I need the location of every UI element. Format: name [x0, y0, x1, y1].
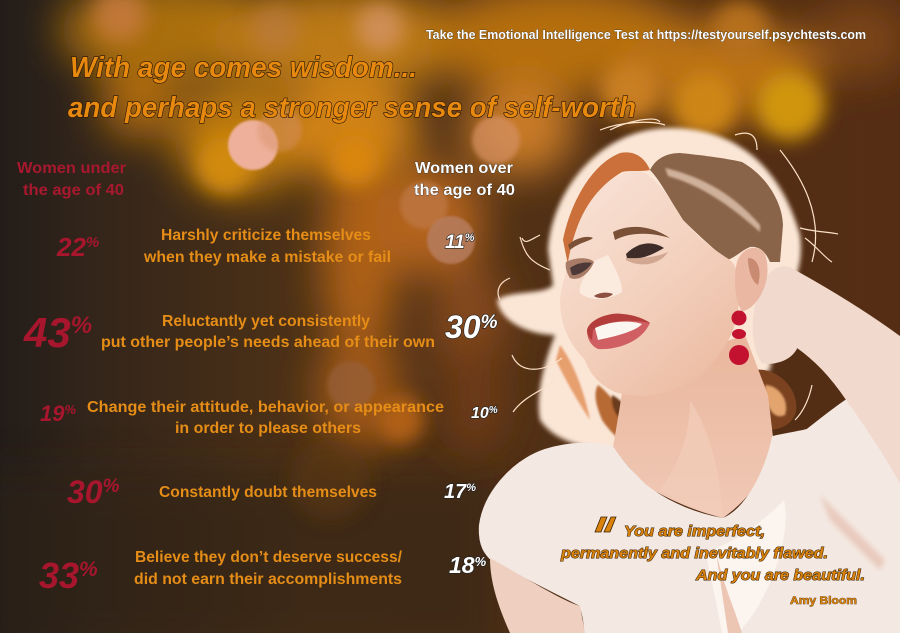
row 5: % [79, 558, 98, 581]
row 1 [56, 227, 475, 266]
flyaway hair strands [498, 119, 838, 420]
orange hairline [563, 152, 650, 265]
earring [729, 310, 749, 365]
hair halo [497, 128, 801, 455]
quote: You are imperfect, [624, 523, 765, 540]
row 2: 30 [445, 309, 481, 345]
row 3: % [64, 402, 76, 417]
row 3: in order to please others [175, 420, 361, 437]
dress [480, 400, 900, 633]
row 2 [23, 309, 498, 356]
row 5: did not earn their accomplishments [134, 571, 402, 588]
row 3 [40, 399, 498, 437]
row 5: % [475, 554, 487, 569]
quote: And you are beautiful. [695, 567, 865, 584]
row 4 [67, 474, 476, 510]
row 1: % [465, 232, 475, 244]
row 4: % [466, 482, 476, 494]
nose [580, 255, 622, 299]
row 1: Harshly criticize themselves [161, 227, 371, 244]
column heading: women under 40 [17, 160, 126, 199]
mouth [587, 314, 650, 349]
row 5: 18 [449, 552, 475, 578]
row 5: 33 [39, 555, 79, 596]
eyebrows and eyes [568, 227, 670, 250]
row 3: 19 [40, 401, 64, 426]
row 2: Reluctantly yet consistently [162, 313, 370, 330]
title: With age comes wisdom... [70, 52, 417, 84]
row 5 [39, 549, 487, 596]
left arm [490, 558, 585, 633]
row 3: 10 [471, 405, 489, 422]
quote: Amy Bloom [790, 595, 857, 607]
column heading: women under 40: Women under [17, 160, 126, 177]
hair curl behind neck [748, 370, 796, 430]
lower hair texture left [556, 345, 638, 452]
row 2: put other people’s needs ahead of their own [101, 334, 435, 351]
title [68, 52, 636, 124]
neck and chest [613, 335, 773, 518]
row 5: Believe they don’t deserve success/ [135, 549, 403, 566]
row 1: when they make a mistake or fail [143, 249, 391, 266]
quote: permanently and inevitably flawed. [560, 545, 828, 562]
column heading: women over 40 [414, 160, 515, 199]
row 1: % [86, 234, 99, 251]
quote [560, 517, 865, 607]
icon: quotation mark [595, 517, 616, 532]
column heading: women under 40: the age of 40 [23, 182, 124, 199]
ear [735, 248, 768, 312]
row 4: 30 [67, 474, 103, 510]
row 3: % [489, 405, 498, 416]
row 4: % [103, 476, 120, 497]
photo: smiling woman [480, 119, 900, 633]
row 3: Change their attitude, behavior, or appearance [87, 399, 444, 416]
row 2: 43 [24, 309, 71, 356]
row 1: 22 [57, 232, 86, 262]
row 2: % [481, 312, 498, 333]
face [560, 171, 740, 396]
row 2: % [71, 312, 92, 339]
row 4: Constantly doubt themselves [159, 484, 377, 501]
column heading: women over 40: Women over [415, 160, 513, 177]
hair top [650, 153, 783, 262]
raised arm [753, 267, 900, 482]
row 4: 17 [444, 481, 466, 503]
column heading: women over 40: the age of 40 [414, 182, 515, 199]
top link text: Take the Emotional Intelligence Test at https://testyourself.psychtests.com [426, 27, 866, 42]
title: and perhaps a stronger sense of self-worth [68, 92, 636, 124]
row 1: 11 [445, 232, 465, 253]
